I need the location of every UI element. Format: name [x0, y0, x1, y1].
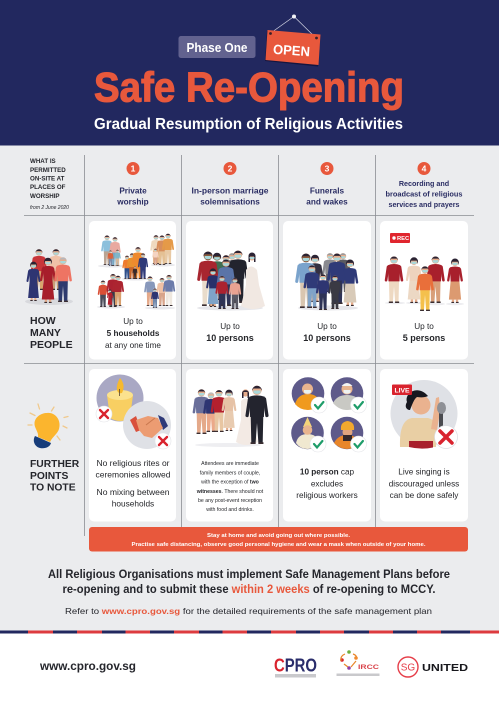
row label: how many people	[25, 249, 73, 351]
caption: excludes	[311, 480, 343, 488]
row label: how many people: MANY	[30, 327, 61, 339]
badge: LIVE: LIVE	[394, 388, 410, 394]
left heading: what is permitted: PERMITTED	[30, 167, 66, 174]
icon: hanging OPEN sign: OPEN	[272, 42, 310, 59]
caption	[196, 461, 264, 513]
left heading: what is permitted: PLACES OF	[30, 184, 66, 191]
left heading: what is permitted	[30, 158, 69, 211]
icon: Buddhist monk	[292, 377, 324, 410]
caption: 5 persons	[403, 333, 445, 343]
icon: Catholic priest	[291, 417, 324, 449]
caption: Up to	[317, 322, 337, 331]
icon: handshake	[123, 401, 171, 449]
row label: further points to note	[28, 404, 80, 494]
icon: Sikh priest	[331, 417, 363, 449]
icon: red cross, candle	[96, 406, 112, 422]
caption: family members of couple,	[200, 470, 260, 476]
column 2 heading: In-person marriage	[192, 186, 269, 196]
caption	[403, 322, 445, 343]
card: marriage notes	[186, 369, 273, 522]
banner: stay at home	[89, 527, 468, 552]
caption	[296, 468, 358, 500]
illustration: group in dark clothes	[297, 253, 358, 310]
column 2 heading	[192, 162, 269, 206]
icon: hanging OPEN sign	[265, 14, 320, 66]
card: no rites, no mixing	[89, 369, 176, 522]
logo: SG United: UNITED	[422, 662, 468, 674]
caption: can be done safely	[390, 491, 459, 500]
footer white area	[0, 634, 499, 701]
reference line: Refer to www.cpro.gov.sg for the detailed requirements of the safe management plan	[65, 607, 433, 616]
caption	[389, 468, 459, 500]
card: live singing	[380, 369, 468, 522]
logo: SG United	[398, 657, 468, 677]
caption: 5 households	[107, 329, 160, 338]
card: recording and broadcast	[380, 221, 468, 360]
icon: imam	[331, 377, 363, 410]
badge: Phase One: Phase One	[186, 41, 248, 55]
caption: Up to	[220, 322, 240, 331]
icon: check 1	[311, 397, 327, 413]
column 3 heading: 3	[325, 164, 330, 174]
caption: religious workers	[296, 491, 358, 500]
caption: Up to	[414, 322, 434, 331]
logo: CPRO: CPRO	[274, 656, 317, 676]
left heading: what is permitted: WHAT IS	[30, 158, 56, 165]
caption: discouraged unless	[389, 480, 459, 488]
caption	[206, 322, 254, 343]
caption: 10 person cap	[300, 468, 355, 476]
card: funerals and wakes	[283, 221, 371, 360]
illustration: wedding group	[197, 250, 265, 310]
column 4 heading: Recording and	[399, 179, 449, 188]
column 4 heading: broadcast of religious	[386, 190, 462, 198]
column 2 heading: solemnisations	[200, 198, 260, 206]
row label: further points to note: POINTS	[30, 471, 68, 482]
footer url: www.cpro.gov.sg	[39, 661, 136, 673]
caption: be any post-event reception	[198, 498, 262, 504]
card: private worship	[89, 221, 176, 360]
row label: how many people: HOW	[30, 315, 56, 327]
card: marriage solemnisations	[186, 221, 273, 360]
column 3 heading	[306, 162, 348, 206]
caption: Attendees are immediate	[201, 461, 259, 467]
row label: further points to note: TO NOTE	[30, 482, 76, 494]
illustration: five households	[97, 234, 175, 310]
caption	[96, 458, 171, 508]
left heading: what is permitted: from 2 June 2020	[30, 205, 69, 211]
stripe divider	[0, 630, 499, 634]
column 3 heading: and wakes	[306, 198, 348, 206]
caption: with the exception of two	[201, 480, 259, 486]
illustration: family and wedding couple	[194, 386, 267, 447]
illustration: five people	[385, 256, 464, 311]
banner: stay at home: Practise safe distancing, observe good personal hygiene and wear a mask when outside of your home.	[132, 542, 426, 548]
column 1 heading	[116, 162, 149, 206]
icon: check 3	[310, 436, 326, 452]
caption: 10 persons	[206, 333, 254, 343]
logo: IRCC: IRCC	[358, 664, 379, 671]
table grid lines	[24, 155, 474, 536]
badge: REC: REC	[397, 236, 410, 242]
header band	[0, 0, 499, 146]
icon: check 4	[350, 436, 366, 452]
column 1 heading: Private	[119, 186, 147, 196]
caption: Up to	[123, 317, 143, 326]
notice: safe management plans	[48, 569, 450, 596]
caption: with food and drinks.	[206, 507, 254, 513]
caption: No mixing between	[96, 487, 170, 497]
icon: light bulb	[28, 404, 68, 448]
caption: No religious rites or	[96, 458, 170, 468]
caption: 10 persons	[303, 333, 351, 343]
left heading: what is permitted: ON-SITE AT	[30, 176, 65, 182]
column 3 heading: Funerals	[310, 186, 345, 196]
card: 10 person cap	[283, 369, 371, 522]
banner: stay at home: Stay at home and avoid going out where possible.	[207, 533, 350, 539]
subtitle: Gradual Resumption of Religious Activities	[94, 116, 403, 133]
icon: family group	[25, 249, 73, 305]
badge: LIVE	[392, 384, 412, 395]
left heading: what is permitted: WORSHIP	[30, 193, 60, 200]
column 4 heading: services and prayers	[388, 200, 460, 209]
column 4 heading: 4	[422, 164, 427, 174]
row label: how many people: PEOPLE	[30, 339, 73, 351]
title: Safe Re-Opening	[94, 64, 404, 110]
caption	[105, 317, 161, 350]
column 4 heading	[386, 162, 462, 209]
column 1 heading: 1	[131, 164, 136, 174]
caption: households	[112, 498, 154, 508]
logo: SG United: SG	[401, 662, 415, 674]
caption: Live singing is	[398, 468, 450, 476]
icon: check 2	[350, 397, 366, 413]
illustration: singer with crossed microphone	[390, 380, 458, 449]
notice: safe management plans: All Religious Organisations must implement Safe Management Plans before	[48, 569, 450, 581]
caption: at any one time	[105, 341, 161, 350]
column 1 heading: worship	[116, 198, 149, 206]
icon: red cross, handshake	[155, 433, 171, 449]
caption: ceremonies allowed	[96, 470, 171, 480]
notice: safe management plans: re-opening and to submit these within 2 weeks of re-opening to MCCY.	[62, 584, 436, 596]
column 2 heading: 2	[228, 164, 233, 174]
logo: IRCC	[336, 650, 380, 676]
badge: Phase One	[178, 36, 256, 58]
icon: candle	[96, 374, 144, 422]
caption	[303, 322, 351, 343]
icon: red cross	[434, 426, 458, 448]
row label: further points to note: FURTHER	[30, 459, 80, 470]
caption: witnesses. There should not	[196, 489, 264, 495]
